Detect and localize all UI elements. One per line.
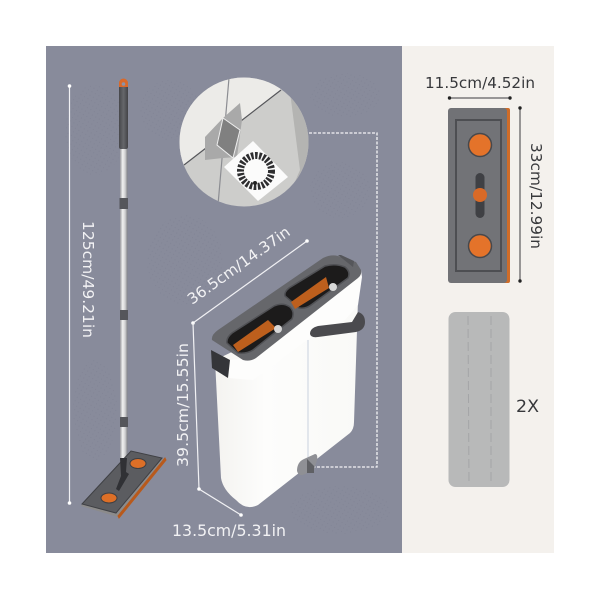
pad quantity label: 2X (516, 397, 539, 417)
plate centre knob (473, 188, 487, 202)
bucket width dimension (191, 239, 309, 325)
microfiber pad (448, 312, 510, 487)
mop: handle and head (81, 78, 166, 518)
bucket depth label: 13.5cm/5.31in (172, 521, 286, 540)
bucket foot clip (297, 454, 317, 475)
bucket clip (211, 350, 230, 378)
bucket height label: 39.5cm/15.55in (174, 343, 192, 467)
mop joint (116, 458, 129, 491)
bucket lid (228, 270, 362, 380)
inset drain (224, 141, 288, 201)
mop head discs (130, 458, 146, 468)
pole collars (120, 198, 128, 427)
inset: drain detail circle (180, 78, 308, 206)
bucket height and depth dimension (193, 323, 243, 517)
dot texture (65, 73, 390, 534)
mop height label: 125cm/49.21in (79, 221, 97, 338)
panel: accessories background (402, 46, 554, 553)
plate height dimension line (518, 106, 522, 283)
bucket seam (307, 340, 309, 458)
mop pole (120, 149, 128, 459)
plate disc top (468, 134, 492, 156)
plate centre slot (476, 173, 484, 218)
dashed connector from drain to bucket (309, 133, 377, 467)
inset clip (205, 103, 242, 160)
mop hanger cap (119, 78, 128, 87)
orange mop in left well (233, 320, 276, 352)
plate disc bottom (468, 234, 492, 258)
top width dimension line (448, 96, 512, 100)
bucket handle (310, 312, 365, 337)
mop height dimension line (68, 84, 71, 505)
mop grip (119, 84, 128, 149)
orange mop in right well (291, 277, 329, 309)
bucket wells (227, 265, 349, 353)
top width label: 11.5cm/4.52in (425, 74, 535, 92)
plate height label: 33cm/12.99in (527, 143, 545, 249)
mop plate top view (448, 108, 510, 283)
rim tab (338, 255, 354, 267)
bucket (211, 255, 365, 507)
mop head (81, 451, 166, 518)
bucket body (215, 300, 358, 507)
panel: dimensions background (46, 46, 402, 553)
bucket width label: 36.5cm/14.37in (184, 223, 294, 308)
bucket rim (212, 255, 361, 361)
